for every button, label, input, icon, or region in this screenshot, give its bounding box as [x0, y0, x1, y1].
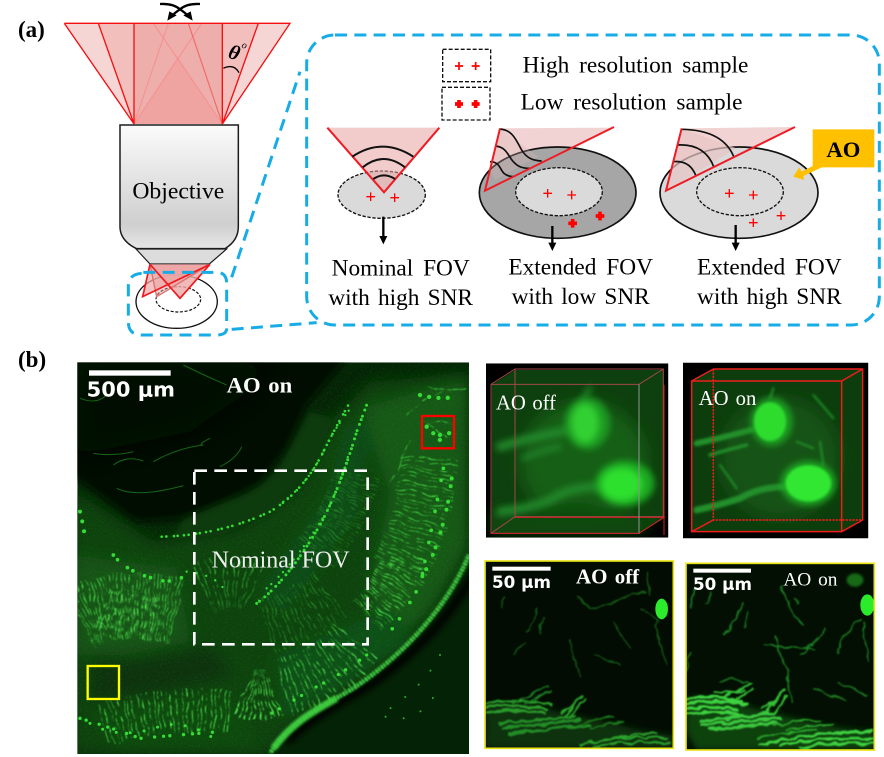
confocal image: AO on: 50 μm [693, 575, 752, 594]
callout: AO: AO [826, 137, 860, 162]
scale bar [492, 567, 551, 571]
3D volume: AO off [486, 363, 668, 538]
red region of interest [422, 416, 454, 448]
diagram: extended FOV low SNR [479, 127, 653, 310]
objective label: Objective [132, 178, 224, 204]
diagram: extended FOV low SNR: with low SNR [512, 284, 650, 310]
angle label: theta o [223, 40, 248, 73]
panel label: (a): (a) [18, 17, 45, 42]
diagram: extended FOV high SNR with AO: Extended FOV [697, 254, 842, 280]
panel label: (b): (b) [18, 347, 46, 372]
diagram: nominal FOV [327, 128, 473, 311]
focal sample ellipses [136, 275, 217, 328]
confocal image: AO off: 50 μm [492, 573, 551, 592]
panel: zoomed field of view comparison [307, 35, 879, 325]
legend: low resolution sample: Low resolution sample [521, 89, 742, 115]
dashed blue callout around focal region with connector lines [128, 72, 317, 335]
angle label: theta o: θ [226, 41, 243, 66]
diagram: microscope objective with scanning beams [64, 4, 290, 328]
legend: low resolution sample [442, 87, 742, 120]
cell bodies [80, 395, 457, 738]
label: AO on: AO on [783, 570, 838, 591]
focused beams [143, 264, 210, 298]
label: AO on: AO on [699, 388, 757, 410]
dark ventricle region [70, 355, 350, 540]
diagram: extended FOV high SNR with AO: with high SNR [697, 284, 842, 310]
scale bar [693, 569, 751, 573]
confocal image: AO on [686, 563, 874, 750]
radial dendrites [80, 385, 467, 725]
label: AO off: AO off [496, 392, 556, 414]
diagram: extended FOV low SNR: Extended FOV [508, 254, 653, 280]
3D volume: AO on [683, 363, 868, 538]
diagram: nominal FOV: Nominal FOV [332, 256, 470, 282]
diagram: extended FOV high SNR with AO [660, 127, 842, 310]
dashed blue frame [307, 35, 879, 325]
dark lower right region and bright arc [270, 555, 473, 757]
icon: rotation arrows [160, 4, 200, 21]
label: Nominal FOV: Nominal FOV [212, 548, 350, 574]
legend: high resolution sample: High resolution sample [523, 53, 748, 79]
fine grain [77, 362, 469, 754]
objective body [120, 125, 238, 264]
angle label: theta o: o [240, 40, 248, 52]
label: AO off: AO off [576, 565, 640, 589]
yellow region of interest [88, 666, 119, 699]
beams above objective [64, 23, 290, 124]
legend: high resolution sample [443, 49, 748, 82]
label: AO on: AO on [227, 372, 293, 397]
callout: AO [793, 129, 874, 180]
scale bar: 500 μm [87, 378, 175, 402]
diagram: nominal FOV: with high SNR [328, 285, 473, 311]
panel: large fluorescence image, AO on [70, 355, 473, 757]
confocal image: AO off [485, 561, 673, 748]
nominal FOV dashed box [194, 471, 368, 644]
tissue body [70, 375, 470, 755]
panels: zoomed AO comparison images [485, 363, 874, 750]
